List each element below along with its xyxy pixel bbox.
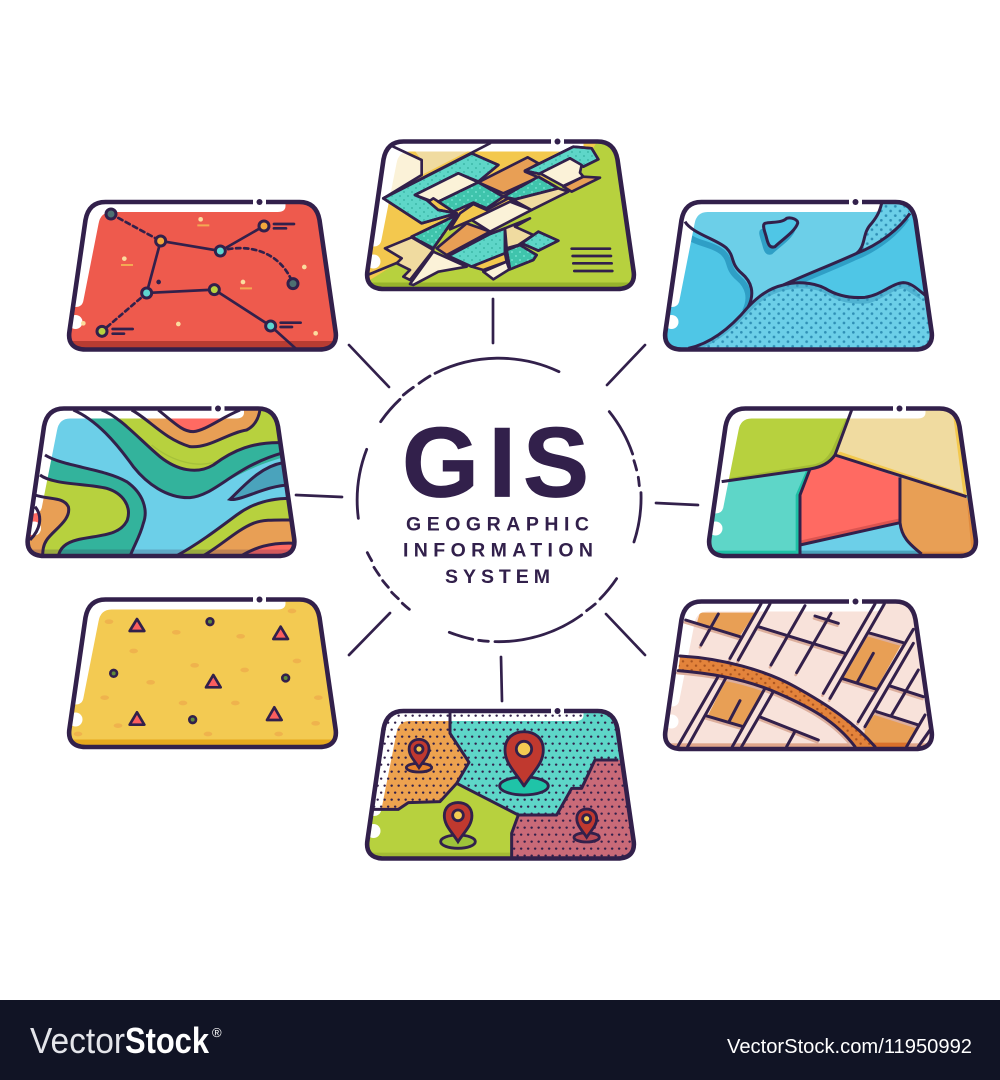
footer logo: ® <box>212 1025 222 1040</box>
footer logo <box>30 1020 222 1061</box>
panel: topographic map <box>20 402 307 562</box>
subtitle: GEOGRAPHIC <box>406 514 589 536</box>
footer bar <box>0 1000 1000 1080</box>
panel: road network <box>662 598 934 752</box>
footer logo: Stock <box>125 1020 210 1061</box>
spokes connecting panels to centre <box>296 299 698 701</box>
footer logo: Vector <box>30 1020 125 1061</box>
panel: land parcels (top centre) <box>360 134 640 294</box>
panel: network map (red) <box>62 195 342 355</box>
panel: point features on sand <box>62 592 342 752</box>
panel: region map <box>700 402 987 562</box>
subtitle <box>403 514 593 588</box>
subtitle: INFORMATION <box>403 540 593 562</box>
title: GIS: GIS <box>402 406 589 518</box>
footer image id: VectorStock.com/11950992 <box>727 1036 972 1058</box>
panel: water map (blue) <box>658 195 938 355</box>
subtitle: SYSTEM <box>445 566 550 588</box>
panel: location pins map <box>355 704 642 864</box>
dashed circle <box>357 358 641 642</box>
